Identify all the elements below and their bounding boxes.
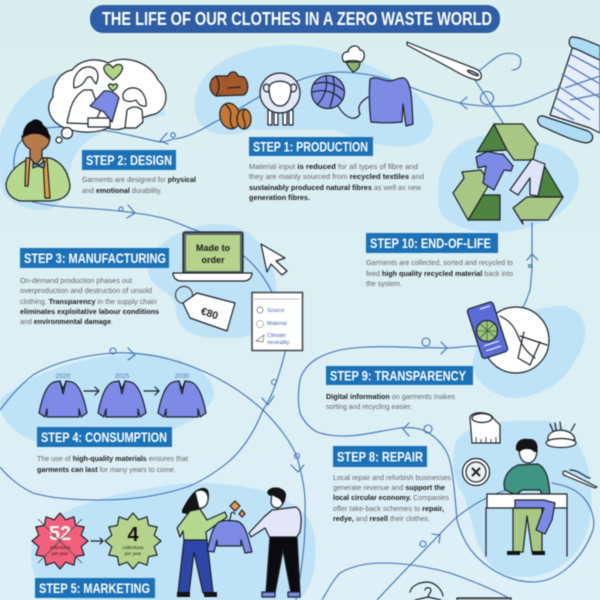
badge: 52 collections	[32, 513, 88, 569]
blob: repair	[453, 420, 592, 577]
figure: repairer at table	[486, 439, 567, 556]
step 2	[82, 150, 196, 195]
step 1: STEP 1: PRODUCTION	[253, 140, 368, 154]
step 3: On-demand production phases out	[20, 278, 132, 285]
icon: laptop made to order: Made to	[196, 243, 230, 253]
icon: thought cloud	[49, 59, 166, 143]
blob: manufacturing	[148, 224, 277, 338]
step 3: clothing. Transparency in the supply chain	[20, 299, 157, 306]
icon: cursor	[261, 244, 287, 275]
step 10	[366, 233, 513, 288]
icon: button	[462, 458, 490, 486]
step 3: STEP 3: MANUFACTURING	[24, 251, 166, 266]
figure: man	[249, 487, 301, 597]
icon: recycling symbol	[453, 124, 563, 224]
step 1	[249, 137, 424, 202]
step 8: Local repair and refurbish businesses	[333, 475, 451, 482]
icon: recycled jeans	[510, 159, 545, 196]
step 2: STEP 2: DESIGN	[86, 153, 172, 168]
icon: price tag: €80	[199, 305, 220, 322]
icon: pin cushion	[546, 422, 576, 448]
step 8	[333, 446, 451, 523]
step 10: Garments are collected, sorted and recycled to	[366, 260, 513, 267]
step 9: sorting and recycling easier.	[326, 404, 412, 411]
timeline: sweaters	[39, 373, 206, 417]
blob: production	[195, 45, 433, 147]
step 4: STEP 4: CONSUMPTION	[41, 430, 167, 445]
step 2: and emotional durability.	[82, 188, 162, 195]
badge: 52 collections: collections	[49, 545, 71, 550]
step 8: STEP 8: REPAIR	[337, 450, 423, 464]
step 9	[326, 366, 473, 411]
icon: measuring tape	[470, 413, 500, 443]
icon: recycled t-shirt	[476, 152, 513, 190]
step 4: The use of high-quality materials ensures that	[37, 456, 188, 463]
step 8: local circular economy. Companies	[333, 495, 449, 502]
blob: consumption	[0, 354, 214, 445]
icon: needle	[407, 42, 481, 80]
figure: woman	[177, 488, 227, 597]
badge: 52 collections: 52	[49, 523, 71, 545]
timeline: sweaters: 2025	[115, 373, 130, 380]
icon: laptop made to order	[173, 232, 252, 281]
icon: laptop made to order: order	[201, 255, 225, 265]
step 9: Digital information on garments makes	[326, 394, 456, 401]
thread arrows and loops	[110, 92, 538, 547]
icon: phone in hand	[467, 301, 549, 373]
arrow	[91, 538, 103, 544]
icon: long sleeve top	[369, 78, 413, 126]
step 3	[20, 248, 169, 326]
step 8: offer take-back schemes to repair,	[333, 506, 444, 513]
title: THE LIFE OF OUR CLOTHES IN A ZERO WASTE WORLD	[102, 9, 492, 29]
step 10: STEP 10: END-OF-LIFE	[370, 236, 491, 251]
step 3: eliminates exploitative labour conditions	[20, 309, 159, 316]
icon: yarn ball	[312, 76, 368, 118]
icon: thread spool	[538, 37, 600, 143]
step 4: garments can last for many years to come.	[37, 467, 176, 474]
blob: design	[0, 72, 166, 210]
step 2: Garments are designed for physical	[82, 177, 196, 184]
card: garment passport	[252, 292, 302, 350]
icon: purple sweater on hanger	[207, 512, 252, 553]
icon: sparkles	[230, 501, 245, 517]
step 5	[35, 578, 155, 598]
icon: coffee beans	[217, 101, 251, 131]
timeline: sweaters: 2020	[56, 373, 71, 380]
badge: 52 collections: per year	[52, 551, 69, 556]
card: garment passport: Climate	[267, 333, 286, 339]
card: garment passport: Material	[267, 321, 287, 327]
badge: 4 collections: per year	[125, 551, 142, 556]
blob: marketing	[31, 483, 316, 600]
blob: transparency	[473, 306, 585, 398]
timeline: sweaters: 2030	[175, 373, 190, 380]
step 10: feed high quality recycled material back into	[366, 271, 513, 278]
step 1: sustainably produced natural fibres as well as new	[249, 185, 422, 192]
icon: sheep	[260, 73, 300, 125]
icon: cotton plant	[342, 46, 364, 72]
step 8: generate revenue and support the	[333, 485, 445, 492]
badge: 4 collections: collections	[122, 545, 144, 550]
step 5: STEP 5: MARKETING	[39, 581, 150, 596]
icon: log	[210, 72, 248, 96]
step 3: and environmental damage.	[20, 319, 113, 326]
icon: price tag	[176, 286, 235, 331]
blob: end-of-life	[438, 135, 579, 232]
panel: bottom garment box	[457, 598, 511, 600]
step 1: generation fibres.	[249, 195, 310, 202]
card: garment passport: Source	[267, 308, 284, 314]
step 8: redye, and resell their clothes.	[333, 516, 430, 523]
title	[90, 5, 500, 33]
badge: 4 collections: 4	[127, 524, 139, 546]
card: garment passport: neutrality	[267, 340, 290, 346]
step 9: STEP 9: TRANSPARENCY	[330, 368, 466, 384]
badge: 4 collections	[105, 513, 161, 569]
step 4	[37, 427, 188, 474]
step 1: they are mainly sourced from recycled textiles and	[249, 174, 424, 181]
icon: designer	[6, 119, 70, 201]
icon: hanger	[410, 582, 443, 600]
icon: needle and thread	[563, 470, 597, 488]
step 10: the system.	[366, 281, 402, 288]
step 1: Material input is reduced for all types of fibre and	[249, 164, 418, 171]
step 3: overproduction and destruction of unsold	[20, 288, 152, 295]
